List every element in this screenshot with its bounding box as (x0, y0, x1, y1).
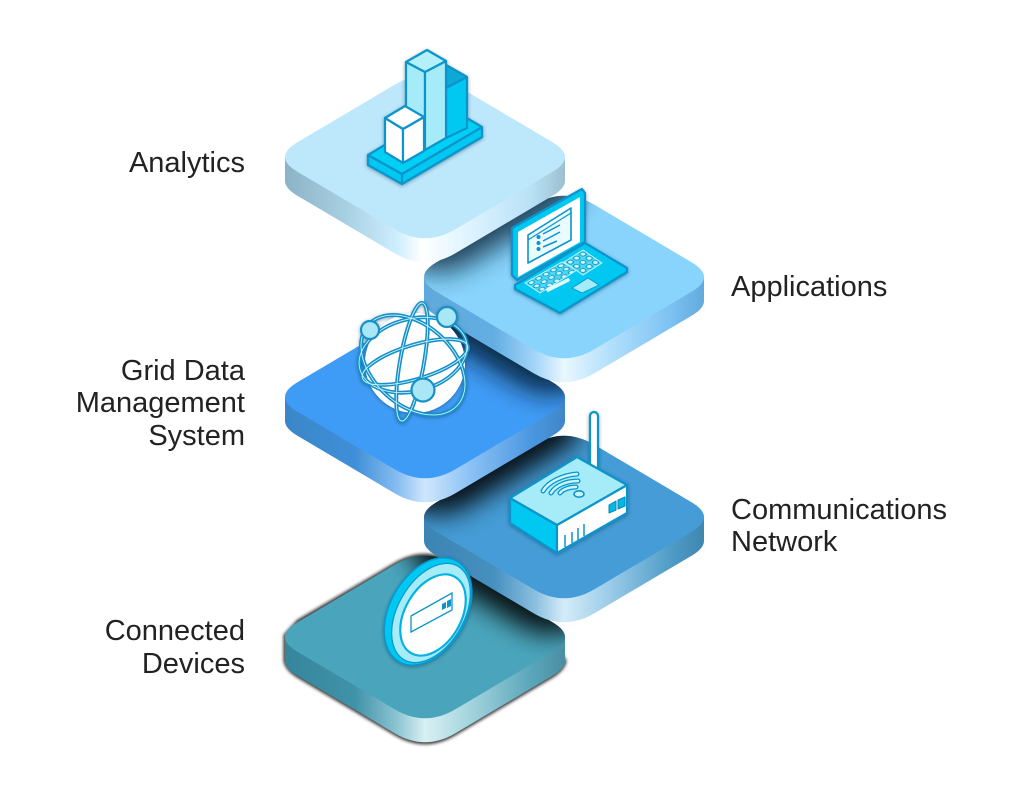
icon: bar chart (368, 50, 482, 184)
label: communications network (731, 494, 947, 558)
icon: globe (342, 295, 484, 435)
panel: grid data management plate (285, 326, 565, 502)
panel: analytics plate (285, 76, 565, 262)
label: grid data management system: Grid Data (121, 355, 246, 387)
label: grid data management system: System (148, 420, 245, 452)
label: applications: Applications (731, 271, 887, 303)
label: communications network: Communications (731, 494, 947, 526)
label: connected devices: Connected (105, 615, 245, 647)
label: grid data management system (76, 355, 246, 452)
panel: connected devices plate (281, 551, 569, 747)
icon: wifi router (510, 412, 627, 553)
label: communications network: Network (731, 526, 838, 558)
label: connected devices: Devices (142, 648, 245, 680)
icon: smart meter (366, 542, 490, 681)
label: analytics: Analytics (129, 147, 245, 179)
label: connected devices (105, 615, 245, 680)
icon: laptop (512, 189, 627, 313)
panel: applications plate (424, 196, 704, 382)
label: grid data management system: Management (76, 387, 245, 419)
panel: communications network plate (424, 436, 704, 622)
